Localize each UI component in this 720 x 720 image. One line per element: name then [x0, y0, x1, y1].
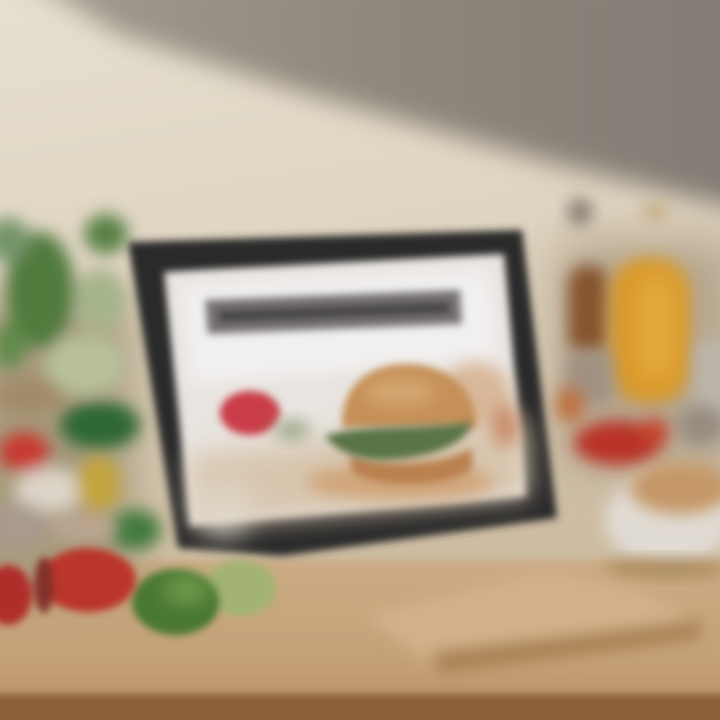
right bowl: [604, 462, 720, 577]
left produce backdrop: [0, 300, 130, 590]
blurred headline on screen: [205, 290, 462, 334]
right tomatoes: [556, 387, 720, 465]
foreground tomatoes: [0, 548, 136, 625]
cutting board: [365, 572, 700, 672]
diagonal wall shadow: [15, 0, 720, 212]
screen lower food background: [190, 420, 528, 526]
burger on screen: [305, 363, 519, 500]
foreground cucumbers: [132, 560, 276, 635]
wooden table: [0, 560, 720, 720]
red tomato on screen: [220, 391, 310, 440]
left vegetable pile: [0, 432, 120, 547]
tablet frame: [128, 230, 557, 556]
right produce backdrop: [560, 240, 720, 470]
leafy greens: [0, 214, 161, 550]
tablet screen: [164, 254, 526, 526]
right bottles: [565, 198, 720, 440]
glass in foreground: [199, 480, 251, 540]
